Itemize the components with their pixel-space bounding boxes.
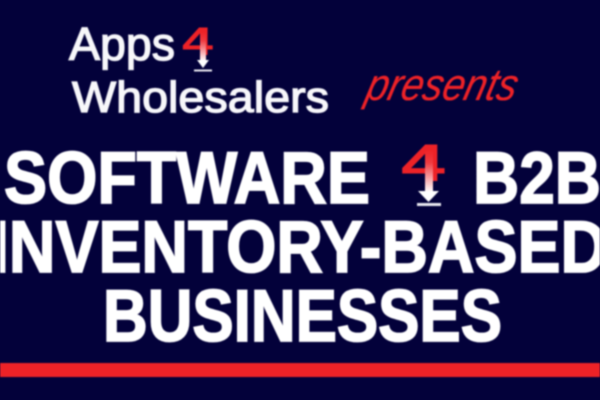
- red divider bar: [0, 363, 600, 377]
- title line 1: SOFTWARE: SOFTWARE: [4, 138, 370, 219]
- logo text: Wholesalers: Wholesalers: [72, 73, 329, 122]
- title line 3: BUSINESSES: BUSINESSES: [103, 276, 502, 357]
- logo icon: red 4 with download arrow: [182, 20, 214, 72]
- title icon: red 4 with download arrow: 4: [401, 134, 446, 193]
- logo: Apps4Wholesalers: [69, 18, 329, 122]
- logo text: Apps: Apps: [69, 18, 175, 70]
- presents script label: presents: [360, 60, 524, 110]
- title: [0, 134, 600, 357]
- title icon: red 4 with download arrow: [401, 134, 446, 206]
- logo icon: red 4 with download arrow: 4: [182, 20, 214, 64]
